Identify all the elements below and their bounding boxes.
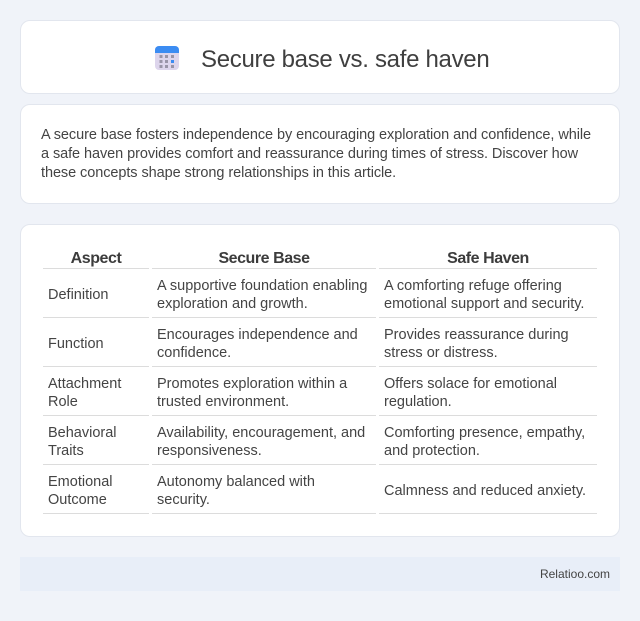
- table contents: A supportive foundation enabling: [157, 278, 367, 294]
- table contents: Safe Haven: [447, 250, 529, 267]
- table contents: A comforting refuge offering: [384, 278, 562, 294]
- table contents: Encourages independence and: [157, 327, 358, 343]
- intro text: a safe haven provides comfort and reassurance during times of stress. Discover how: [41, 146, 578, 162]
- table contents: Aspect: [71, 250, 121, 267]
- comparison table: [43, 250, 597, 514]
- table contents: responsiveness.: [157, 443, 262, 459]
- title card: [20, 20, 620, 94]
- table contents: Provides reassurance during: [384, 327, 569, 343]
- table contents: Autonomy balanced with: [157, 474, 315, 490]
- table contents: emotional support and security.: [384, 296, 584, 312]
- table contents: Function: [48, 336, 104, 352]
- table contents: trusted environment.: [157, 394, 289, 410]
- table contents: security.: [157, 492, 210, 508]
- table contents: Comforting presence, empathy,: [384, 425, 585, 441]
- table contents: Offers solace for emotional: [384, 376, 557, 392]
- table contents: Availability, encouragement, and: [157, 425, 365, 441]
- table contents: Attachment: [48, 376, 121, 392]
- table contents: stress or distress.: [384, 345, 498, 361]
- intro text: A secure base fosters independence by encouraging exploration and confidence, while: [41, 127, 591, 143]
- icon: calendar: [155, 46, 179, 70]
- title: Secure base vs. safe haven: [201, 46, 489, 73]
- intro text: [41, 127, 591, 181]
- footer bar: [20, 557, 620, 591]
- table contents: Definition: [48, 287, 108, 303]
- table contents: Promotes exploration within a: [157, 376, 347, 392]
- table card: [20, 224, 620, 537]
- table contents: Emotional: [48, 474, 112, 490]
- table contents: Calmness and reduced anxiety.: [384, 483, 586, 499]
- intro text: these concepts shape strong relationships in this article.: [41, 165, 396, 181]
- table contents: Behavioral: [48, 425, 117, 441]
- table contents: confidence.: [157, 345, 231, 361]
- intro card: [20, 104, 620, 204]
- footer text: Relatioo.com: [540, 567, 610, 581]
- table contents: Role: [48, 394, 78, 410]
- table contents: exploration and growth.: [157, 296, 308, 312]
- table contents: Outcome: [48, 492, 107, 508]
- table contents: and protection.: [384, 443, 480, 459]
- table contents: Traits: [48, 443, 84, 459]
- table contents: regulation.: [384, 394, 452, 410]
- table contents: Secure Base: [218, 250, 310, 267]
